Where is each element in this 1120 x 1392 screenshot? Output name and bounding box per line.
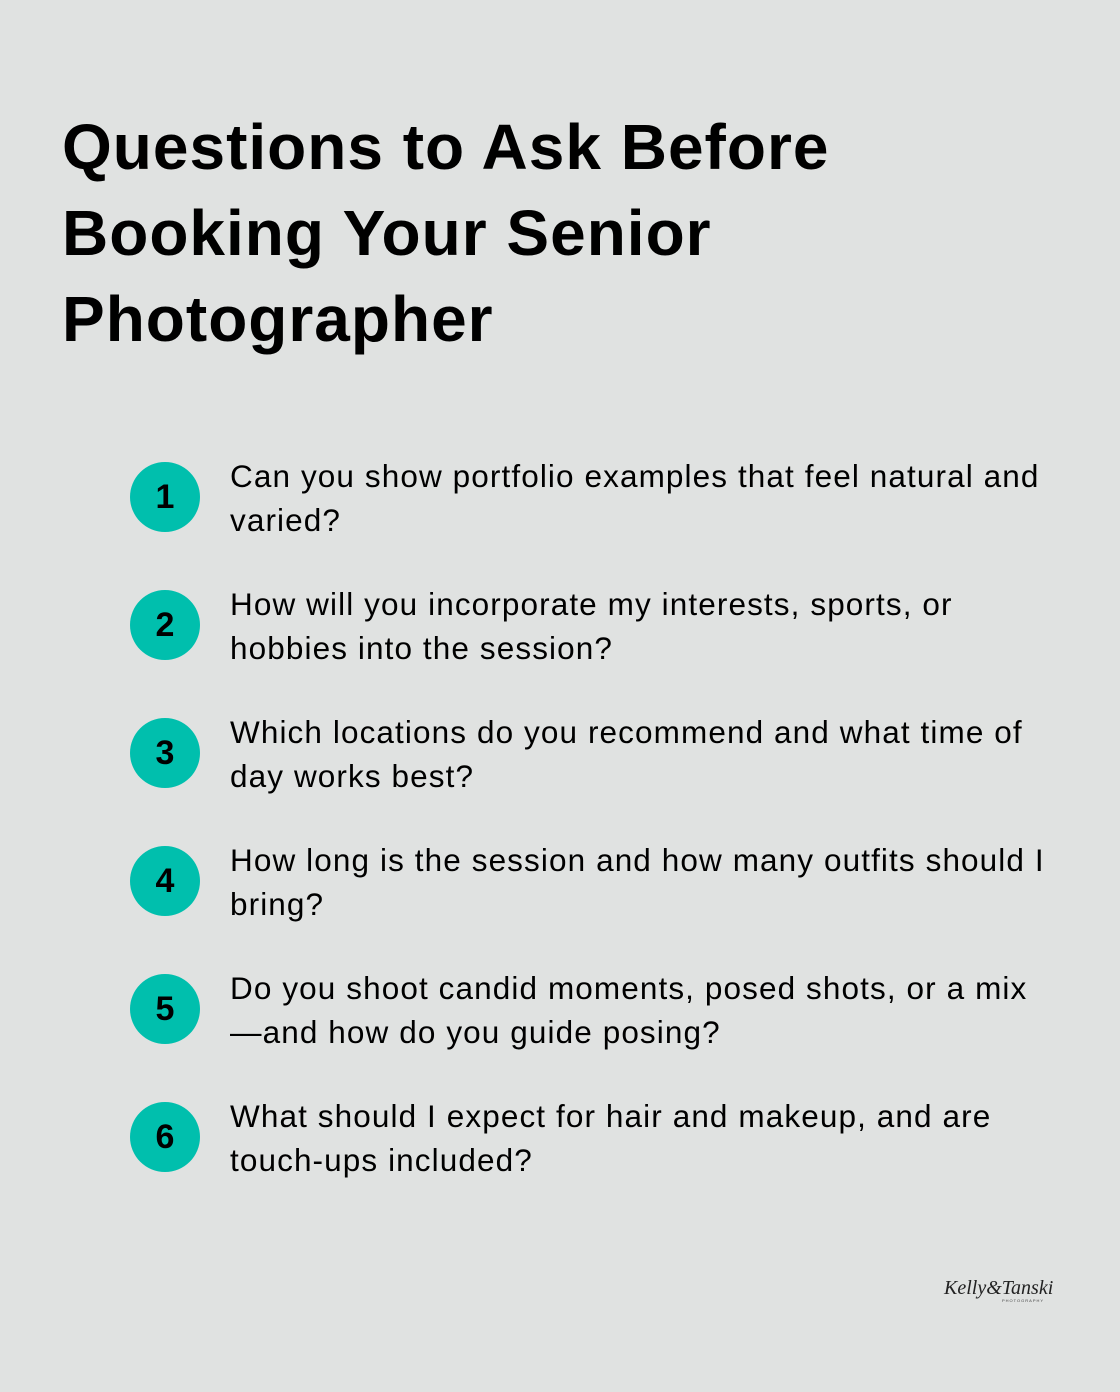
title: Booking Your Senior <box>62 197 712 269</box>
item 3 <box>130 714 1023 794</box>
item 6: touch-ups included? <box>230 1142 533 1178</box>
item 4: bring? <box>230 886 324 922</box>
title: Photographer <box>62 283 494 355</box>
title: Questions to Ask Before <box>62 111 829 183</box>
item 1 <box>130 458 1040 538</box>
item 5: Do you shoot candid moments, posed shots, or a mix <box>230 970 1027 1006</box>
item 5 <box>130 970 1027 1050</box>
item 4: 4 <box>156 862 174 900</box>
item 2: How will you incorporate my interests, sports, or <box>230 586 953 622</box>
item 1: Can you show portfolio examples that feel natural and <box>230 458 1040 494</box>
logo signature: PHOTOGRAPHY <box>1002 1298 1044 1303</box>
item 2: hobbies into the session? <box>230 630 613 666</box>
item 3: 3 <box>156 734 174 772</box>
item 4 <box>130 842 1045 922</box>
item 6 <box>130 1098 991 1178</box>
item 6: What should I expect for hair and makeup, and are <box>230 1098 991 1134</box>
item 3: day works best? <box>230 758 474 794</box>
logo signature: Kelly&Tanski <box>944 1277 1053 1299</box>
item 1: 1 <box>156 478 174 516</box>
item 5: 5 <box>156 990 174 1028</box>
item 2: 2 <box>156 606 174 644</box>
item 2 <box>130 586 953 666</box>
title <box>62 111 829 355</box>
item 1: varied? <box>230 502 341 538</box>
item 6: 6 <box>156 1118 174 1156</box>
item 4: How long is the session and how many outfits should I <box>230 842 1045 878</box>
item 3: Which locations do you recommend and what time of <box>230 714 1023 750</box>
item 5: —and how do you guide posing? <box>230 1014 721 1050</box>
